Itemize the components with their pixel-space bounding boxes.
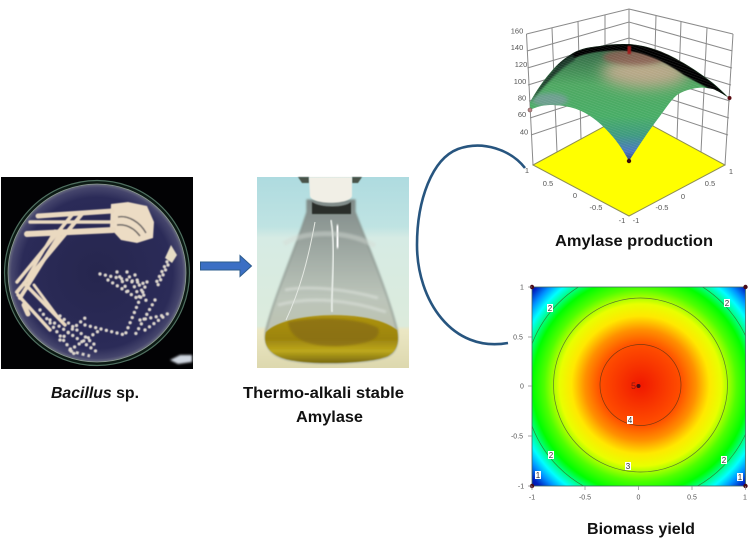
label: Thermo-alkali stable Amylase	[243, 385, 404, 426]
axis labels: 0.5	[543, 179, 553, 188]
axis labels: 60	[518, 110, 526, 119]
axis labels: 1	[729, 167, 733, 176]
axis labels: -0.5	[656, 203, 668, 212]
contour labels: 5	[631, 381, 636, 391]
axis labels: 0.5	[705, 179, 715, 188]
photo: Bacillus culture plate	[1, 177, 193, 369]
axis labels: 120	[515, 60, 527, 69]
axis labels: 0	[573, 191, 577, 200]
chart: contour plot of biomass yield: -1	[529, 494, 535, 502]
contour labels: 4	[628, 416, 633, 425]
chart: contour plot of biomass yield: 0.5	[687, 494, 697, 502]
axis labels: 40	[520, 128, 528, 136]
chart: contour plot of biomass yield: 0	[637, 494, 641, 502]
contour labels: 2	[549, 451, 554, 460]
label: Amylase production: Amylase production	[555, 233, 713, 250]
chart: contour plot of biomass yield: -1	[518, 484, 524, 490]
axis labels: 1	[525, 166, 529, 175]
chart: contour plot of biomass yield: 0.5	[513, 334, 523, 342]
arc connector	[417, 146, 525, 344]
floor	[533, 113, 725, 216]
axis labels: -1	[633, 216, 639, 225]
chart: contour plot of biomass yield: -0.5	[511, 434, 523, 440]
axis labels: 100	[514, 77, 526, 86]
chart: contour plot of biomass yield	[511, 269, 750, 502]
label: Thermo-alkali stable Amylase: Thermo-alkali stable	[243, 385, 404, 402]
arrow: culture to flask	[200, 256, 252, 276]
chart: 3D surface of amylase production	[511, 9, 735, 225]
axis labels: 160	[511, 26, 523, 36]
chart: contour plot of biomass yield: 0	[520, 384, 524, 390]
axis labels: 140	[511, 43, 523, 52]
axis labels: -1	[619, 216, 625, 225]
chart: contour plot of biomass yield: -0.5	[579, 494, 591, 502]
design points	[530, 285, 748, 488]
axis labels: 80	[518, 94, 526, 102]
photo: flask of amylase	[257, 177, 409, 368]
contour labels: 3	[626, 462, 631, 471]
axis labels: -0.5	[590, 203, 602, 212]
surface	[530, 44, 728, 160]
label: Bacillus sp.: Bacillus sp.	[51, 385, 139, 402]
contour labels: 1	[536, 471, 541, 480]
axis labels: 0	[681, 192, 685, 201]
contour labels: 2	[548, 304, 553, 313]
contour labels: 1	[738, 473, 743, 482]
label: Thermo-alkali stable Amylase: Amylase	[296, 409, 363, 426]
axis ticks and labels	[528, 287, 746, 490]
chart: contour plot of biomass yield: 1	[520, 284, 524, 292]
chart: contour plot of biomass yield: 1	[743, 494, 747, 502]
contour labels: 2	[725, 299, 730, 308]
axis labels	[511, 26, 733, 225]
contour labels: 2	[722, 456, 727, 465]
contour labels	[535, 299, 743, 482]
label: Biomass yield: Biomass yield	[587, 521, 695, 538]
data points	[528, 108, 532, 112]
